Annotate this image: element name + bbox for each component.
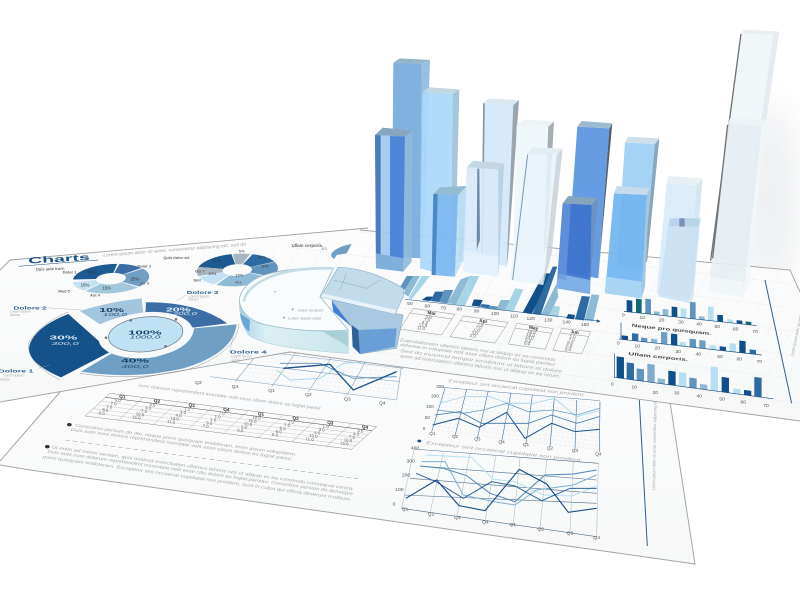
line chart: lower quarterly lines: 100 (395, 487, 404, 493)
table: quarterly values: Q1 (119, 394, 126, 400)
line chart: upper quarterly lines: Q1 (523, 442, 529, 447)
donut chart: small left (36, 263, 152, 298)
bar chart: Ullam corporis: 40 (697, 393, 702, 399)
text block: lower sheet notes: porro quisquam endoloram. Excepteur sint occaecat cupidatat non proident, sunt in culpa qui officia deserunt mollitum. (41, 454, 352, 502)
table: quarterly values: 3.0 (357, 428, 364, 434)
bar chart: Neque pro quisquam: 0 (617, 341, 620, 347)
table: quarterly values: Q2 (293, 415, 299, 421)
line chart: partly hidden chart: Q1 (268, 388, 275, 394)
table: Jun: 7.0 (569, 337, 575, 343)
pie labels: Lorem ipsum (188, 294, 209, 298)
panel: lower sheet (0, 335, 695, 564)
bar chart: top (622, 295, 758, 335)
line chart: lower quarterly lines: 300 (407, 458, 415, 464)
table: quarterly values: Q3 (189, 402, 195, 408)
panel: pie charts (0, 241, 352, 382)
line chart: lower quarterly lines: Q2 (428, 511, 435, 517)
line chart: upper quarterly lines: 0 (423, 426, 426, 431)
text block: lower sheet notes: Consrolom persum do der, neque porro quisquam endoloram, enim ipsum voluptatem. (75, 423, 297, 457)
table: quarterly values: 7.0 (349, 434, 356, 440)
bar chart: Neque pro quisquam: 10 (635, 343, 640, 349)
large pie chart: 1000,0 (130, 334, 161, 340)
bar chart: Ullam corporis: 70 (763, 403, 769, 409)
bar: pale back centre (482, 99, 519, 267)
pie labels: Dolore 3 (187, 290, 219, 295)
line chart: upper quarterly lines: Q3 (474, 437, 481, 442)
flat bar chart on sheet: 140 (562, 320, 571, 326)
text block: table notes: doloreat in voluptate velit esse cillum dolore eu fugiat pariatur (400, 342, 557, 367)
line chart: lower quarterly lines: 400 (411, 446, 419, 452)
line chart: lower quarterly lines: Q1 (509, 522, 516, 528)
line chart: lower quarterly lines (393, 440, 600, 541)
text block: lower sheet notes: irure dolorum reprehenderit inorotate velit esse cilium dolore eu fugiat pariur. (138, 383, 322, 411)
table: quarterly values: 7.0 (219, 411, 225, 416)
text block: lower sheet notes: Duis aute irure dolorum reprehenderit incorotate velit esse cillu dolore eu fugiat pariatur. Consrolom persum do demrique (47, 449, 354, 496)
table: quarterly values: 1.0 (210, 417, 217, 423)
line chart: lower quarterly lines: Q2 (537, 527, 544, 533)
bar chart: Ullam corporis (611, 351, 773, 409)
table: quarterly values: 1.0 (184, 406, 191, 412)
bar: pale front left (463, 161, 504, 277)
table: Mar: 11.0 (417, 325, 426, 331)
line chart: upper quarterly lines: Q4 (499, 440, 505, 445)
bar chart: top: 70 (752, 329, 758, 335)
table: Jun (553, 328, 591, 354)
bar chart: top: 30 (678, 320, 684, 326)
large pie chart: 100% (128, 330, 162, 336)
flat bar chart on sheet: 50 (407, 301, 413, 307)
line chart: lower quarterly lines: Q3 (567, 531, 574, 537)
line chart: lower quarterly lines: 200 (402, 473, 410, 479)
pie labels: Dolore 4 (230, 349, 267, 354)
bar: pale white front (510, 147, 563, 285)
flat bar chart on sheet: 150 (581, 322, 589, 328)
large pie chart: 100,0 (103, 312, 127, 318)
donut chart: small centre: 5% (239, 249, 245, 254)
table: quarterly values: 7.0 (141, 408, 148, 414)
donut chart: small centre: Quis dolor sit. (163, 255, 190, 260)
donut chart: clipped right: 4 0 (322, 247, 327, 251)
text block: table notes: enim ad exercitation ullamco laboris nisi ut aliquip ex ea rerum. (400, 353, 561, 379)
margin rule with vertical note, right sheet (765, 277, 800, 403)
donut chart: small centre: 15% (235, 273, 244, 278)
3D glass bars (375, 29, 779, 303)
donut chart: small left: Ver 3 (139, 280, 150, 285)
donut chart: small centre: Ves (235, 279, 243, 284)
table: Apr: 2.0 (470, 333, 476, 339)
bar chart: Neque pro quisquam (617, 322, 762, 365)
table: quarterly values: 6.0 (276, 429, 282, 435)
donut chart: small left: 10% (81, 283, 89, 288)
bar chart: Neque pro quisquam: 20 (655, 346, 660, 352)
bar chart: Ullam corporis: 60 (741, 400, 746, 406)
table: quarterly values: 7.0 (284, 422, 291, 428)
panel: bar charts and tables on right sheet (400, 277, 800, 409)
table: May: May (529, 325, 539, 331)
table: quarterly values: 0.0 (272, 432, 279, 438)
donut chart: small left: 25% (131, 276, 139, 281)
line chart: partly hidden chart: Q3 (195, 380, 202, 386)
bar: faint blue tall (657, 176, 703, 300)
background shadow (740, 100, 800, 300)
line chart: partly hidden chart: Q3 (344, 397, 351, 403)
table: Apr (450, 316, 508, 343)
table: quarterly values: 8.0 (102, 407, 109, 413)
bar chart: Neque pro quisquam: 60 (737, 356, 742, 362)
bar: pale white back (513, 119, 554, 253)
table: quarterly values: 13.0 (309, 433, 318, 439)
table: quarterly values: 1.0 (215, 414, 221, 420)
bar chart: Ullam corporis: Ullam corporis. (628, 351, 688, 362)
table: quarterly values: 1.0 (288, 419, 295, 425)
glass wedge (321, 267, 403, 354)
donut chart: small centre: 10% (208, 271, 217, 276)
line chart: upper quarterly lines: Q2 (547, 445, 553, 450)
text block: table notes (400, 337, 563, 379)
table: Jun: 0.0 (565, 346, 572, 352)
flat bar chart on sheet: 90 (474, 308, 480, 314)
table: quarterly values: 1.0 (323, 424, 329, 429)
bar chart: top: 0 (622, 313, 625, 319)
donut chart: small left: Dolor 1 (63, 269, 77, 274)
line chart: upper quarterly lines: 300 (436, 384, 444, 389)
donut chart: small left: Mod 5 (58, 289, 71, 294)
donut chart: small left: Aut 4 (90, 293, 101, 298)
donut chart: small centre: 25% (213, 258, 221, 263)
large pie chart: 20% (166, 307, 191, 313)
table: quarterly values: Q2 (154, 398, 160, 404)
line chart: lower quarterly lines: 0 (393, 501, 396, 507)
table: quarterly values (85, 391, 377, 449)
bar: tallest right (711, 29, 779, 261)
glass disc (239, 268, 348, 353)
donut chart: clipped right (292, 243, 352, 259)
table: Apr: 2.0 (477, 322, 484, 328)
pie labels: Lorem ipsum (231, 354, 252, 358)
bar: sky blue tall (617, 137, 659, 270)
bar chart: Neque pro quisquam: Neque pro quisquam. (632, 323, 712, 336)
heading: Charts: Lorem ipsum dolor sit amet, consectetur adipiscing elit, sed do (103, 241, 247, 258)
flat bar chart on sheet: 110 (510, 314, 518, 320)
table: quarterly values: 3.0 (149, 402, 156, 408)
flat bar chart on sheet: 80 (457, 307, 462, 313)
table: quarterly values: Q3 (327, 420, 334, 426)
bar: faint blue short (658, 218, 701, 303)
pie labels: dolore (188, 298, 198, 302)
bar chart: top: 60 (733, 327, 739, 333)
large pie chart: 300,0 (51, 341, 79, 347)
panel: right sheet (290, 230, 800, 424)
table: quarterly values: 16.0 (248, 418, 257, 424)
text block: table notes: Exercitationem ullamco laboris nisi ut aliquip ex ea commodo (400, 337, 557, 362)
table: Mar (400, 308, 455, 335)
flat bar chart on sheet: 60 (425, 304, 430, 310)
flat bar chart on sheet: 130 (544, 318, 553, 324)
table: Apr: 3.0 (472, 330, 478, 336)
table: May: 18.0 (527, 329, 536, 335)
line chart: lower quarterly lines: Q4 (482, 519, 489, 525)
line chart: upper quarterly lines: Excepteur sint occaecat cupidatat non proident. (448, 378, 585, 397)
text block: table notes: Sed do eiusmod tempor incididunt ut labore et dolore (400, 348, 563, 374)
table: quarterly values: 3.0 (206, 420, 213, 426)
table: quarterly values: 5.0 (241, 424, 248, 430)
table: May: 16.0 (526, 332, 535, 338)
text block: lower sheet notes (41, 383, 360, 502)
glass pie (239, 267, 403, 354)
bar: sky blue short (605, 186, 649, 298)
table: quarterly values: 8.0 (280, 426, 286, 431)
large pie chart: 30% (49, 336, 77, 342)
table: quarterly values: 0.0 (99, 410, 105, 416)
donut chart: clipped right: Ullam corporis. (292, 243, 323, 248)
donut chart: small left: Dolor 2 (137, 263, 152, 268)
table: Apr: 1.0 (474, 328, 480, 333)
table: quarterly values: Q4 (362, 424, 368, 430)
line chart: upper quarterly lines: 100 (426, 404, 434, 409)
sheet grid (230, 230, 800, 420)
pie labels: Lorem ipsum (10, 310, 31, 314)
table: Jun: Jun (571, 329, 579, 335)
table: quarterly values: 11.0 (167, 419, 176, 425)
flat bar chart on sheet: 120 (526, 316, 535, 322)
table: May: 0.0 (524, 340, 531, 346)
bar: tall front right (708, 118, 766, 297)
margin rule with vertical note (639, 399, 658, 546)
bar chart: Ullam corporis: 30 (674, 391, 680, 397)
margin rule with vertical note: Lorem ipsum dolor sit amet, consectetur adipiscing elit (651, 399, 658, 490)
large pie chart (28, 298, 239, 380)
table: quarterly values: 7.0 (111, 401, 117, 407)
table: Jun: 6.0 (566, 343, 573, 349)
text block: lower sheet notes: Ut enim ad minim veniam, quis nostrud exercitation ullamco laboris nisi ut aliquip ex ea commodo consequat contra. (52, 444, 354, 491)
line chart: upper quarterly lines (423, 378, 602, 456)
table: Mar: 13.0 (419, 322, 428, 328)
table: quarterly values: 3.0 (319, 427, 325, 433)
pie labels: dolore (0, 378, 10, 382)
glass disc: Lorem ipsum dolor (288, 315, 322, 320)
donut chart: small centre: Oci 7 (195, 268, 206, 273)
donut chart: small centre: Sint (193, 278, 202, 283)
bar: front dark blue (375, 128, 413, 272)
table: quarterly values: Q1 (258, 411, 264, 417)
table: quarterly values: Q4 (223, 407, 230, 413)
pie labels: Lorem ipsum (3, 374, 24, 378)
heading: Charts (18, 241, 247, 266)
bar chart: Ullam corporis: 20 (653, 390, 658, 396)
table: May: 10.0 (525, 335, 534, 341)
line chart: upper quarterly lines: 200 (431, 393, 439, 398)
table: Jun: 8.0 (567, 340, 574, 346)
donut chart: small centre: 20% (261, 263, 269, 268)
glass disc: Dolor sit amet (298, 307, 324, 312)
bar: back tall light blue (420, 87, 467, 277)
donut chart: small left: 15% (102, 285, 111, 290)
table: quarterly values: 7.0 (203, 423, 209, 429)
pie labels: dolore (10, 313, 20, 317)
table: quarterly values: 4.0 (176, 413, 182, 418)
table: quarterly values: 3.0 (180, 409, 187, 415)
heading: Charts: Charts (28, 252, 90, 266)
table: quarterly values: 0.0 (237, 428, 244, 433)
table: quarterly values: 10.0 (244, 421, 253, 427)
table: May: 5.0 (525, 338, 532, 344)
table: Mar: 4.0 (422, 320, 429, 326)
donut chart: small centre: 15% (258, 254, 266, 259)
line chart: lower quarterly lines: Q3 (454, 515, 461, 521)
panel: left sheet (0, 228, 420, 403)
line chart: upper quarterly lines: Q3 (572, 448, 578, 453)
line chart: upper quarterly lines: Q2 (452, 434, 459, 439)
bar chart: top: 50 (715, 324, 720, 330)
table: May (508, 323, 553, 349)
line chart: lower quarterly lines: Q4 (593, 535, 600, 541)
line chart: partly hidden chart: Q2 (305, 392, 312, 398)
bar chart: top: 20 (659, 317, 665, 323)
bar: short blue (432, 186, 467, 277)
bar chart: top: 10 (640, 315, 645, 321)
bar chart: Ullam corporis: 50 (719, 396, 725, 402)
flat bar chart on sheet: 70 (441, 305, 446, 311)
pie labels: dolore (231, 358, 241, 362)
table: quarterly values: 5.0 (115, 398, 121, 403)
line chart: upper quarterly lines: Q1 (429, 431, 436, 436)
bar chart: Neque pro quisquam: 30 (676, 349, 681, 355)
table: quarterly values: 18.0 (252, 415, 261, 421)
pie labels: Dolore 2 (13, 305, 47, 310)
table: Apr: 7.0 (476, 325, 482, 331)
table: quarterly values: 11.0 (306, 436, 314, 442)
table: Mar: 7.0 (424, 317, 431, 323)
bar chart: Ullam corporis: 0 (611, 381, 614, 387)
table: quarterly values: 15.0 (132, 414, 141, 421)
bar chart: Neque pro quisquam: 70 (757, 359, 762, 365)
flat bar chart on sheet (400, 267, 601, 328)
bar: strong blue short (557, 196, 598, 294)
table: Apr: Apr (479, 318, 488, 324)
line chart: partly hidden chart: Q4 (379, 401, 386, 407)
table: quarterly values: 10.0 (136, 411, 145, 417)
table: quarterly values: 7.0 (106, 404, 113, 410)
table: quarterly values: 4.0 (314, 430, 321, 436)
sheet edges (0, 228, 800, 421)
donut chart: small left: Duis aute irure. (36, 266, 65, 272)
table: quarterly values: 15.0 (340, 440, 349, 447)
table: Jun: 1.0 (570, 334, 576, 339)
bar chart: Neque pro quisquam: 40 (696, 351, 701, 357)
bar chart: top: 40 (696, 322, 702, 328)
line chart: lower quarterly lines: Excepteur sint occaecat cupidatat non proident. (426, 440, 583, 463)
text block: lower sheet notes: Duis aute irure doloris reprehenderit inorotate velit esse cilium dolore eu fugiat pariur. (71, 427, 293, 461)
flat bar chart on sheet: 100 (491, 311, 499, 317)
bar: strong blue tall (567, 121, 612, 278)
line chart: partly hidden chart (195, 347, 405, 407)
table: Mar: 3.0 (426, 314, 432, 320)
table: quarterly values: 10.0 (344, 437, 353, 443)
table: Mar: Mar (428, 310, 436, 316)
large pie chart: 400,0 (121, 364, 149, 370)
donut chart: small left: 40% (87, 269, 96, 274)
table: quarterly values: 13.0 (170, 416, 179, 422)
donut chart: small centre (163, 249, 269, 284)
bar chart: Neque pro quisquam: 50 (717, 354, 723, 360)
large pie chart: 40% (121, 359, 149, 365)
large pie chart: 200,0 (171, 311, 197, 317)
line chart: partly hidden chart: Q4 (232, 384, 239, 390)
large pie chart: 10% (99, 308, 124, 314)
line chart: lower quarterly lines: Q1 (402, 507, 409, 513)
table: quarterly values: 4.0 (353, 431, 360, 437)
pie labels (0, 290, 267, 382)
table: quarterly values: 4.0 (145, 405, 152, 411)
bar: back tall blue (392, 58, 430, 258)
bar chart: Ullam corporis: 10 (632, 385, 637, 391)
line chart: upper quarterly lines: Q4 (595, 451, 602, 456)
line chart: upper quarterly lines: 50 (425, 415, 430, 420)
